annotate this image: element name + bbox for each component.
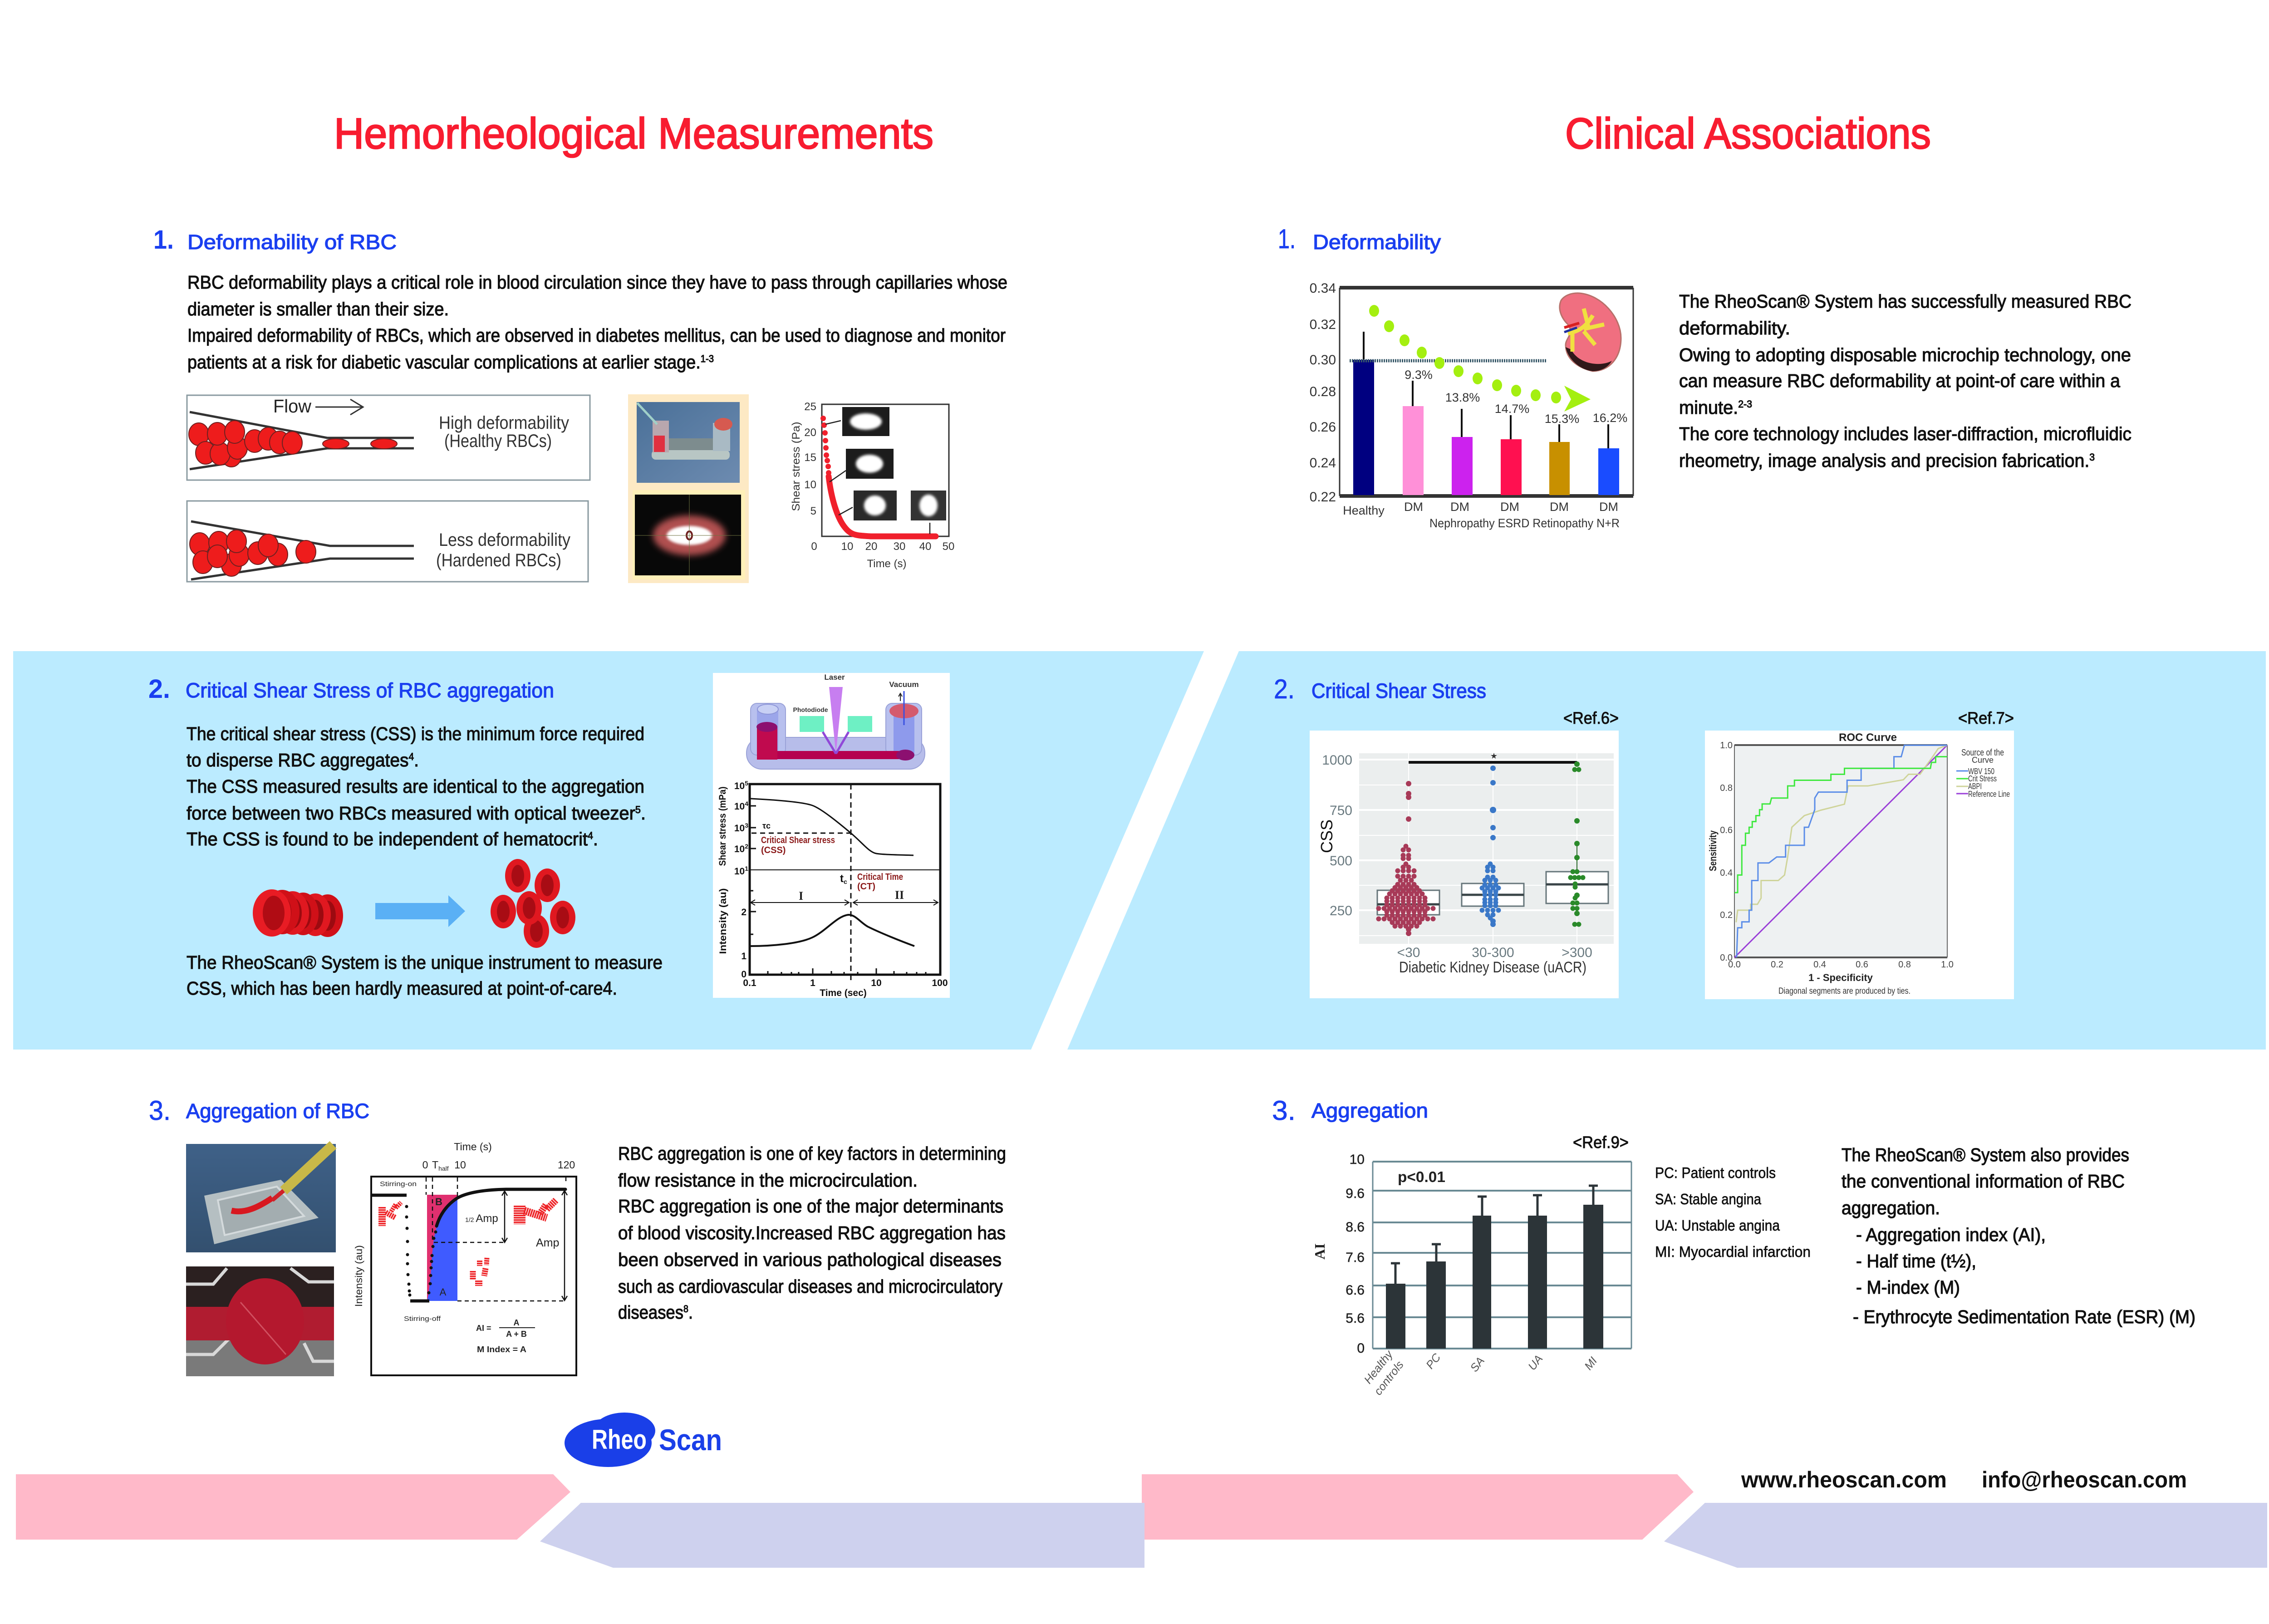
heading: deformability of RBC	[153, 225, 397, 255]
bar chart: aggregation index: 10	[1350, 1152, 1365, 1167]
text block: aggregation parameters	[1842, 1144, 2195, 1327]
reference label 7: <Ref.7>	[1958, 709, 2014, 727]
legend: ROC sources: Reference Line	[1968, 790, 2010, 799]
bar chart: aggregation index: PC	[1424, 1351, 1444, 1371]
heading: critical shear stress: 2.	[1274, 674, 1295, 704]
text block: RheoScan deformability: The RheoScan® System has successfully measured RBC	[1679, 291, 2131, 312]
diagram: high deformability flow: (Healthy RBCs)	[444, 431, 552, 451]
bar chart: aggregation index: AI	[1311, 1243, 1328, 1260]
text block: aggregation description: .	[688, 1302, 693, 1323]
text block: deformability description: 1-3	[701, 353, 714, 364]
bar chart: deformability by group: 0.22	[1310, 490, 1336, 505]
text block: CSS definition: to disperse RBC aggregates	[187, 750, 420, 770]
text block: RheoScan deformability: can measure RBC deformability at point-of care within a	[1679, 370, 2120, 391]
text block: aggregation parameters: aggregation.	[1842, 1197, 1940, 1218]
heading: deformability: Deformability	[1313, 231, 1441, 254]
bar chart: deformability by group: 16.2%	[1593, 411, 1627, 425]
text block: RheoScan CSS: The RheoScan® System is the unique instrument to measure	[187, 952, 663, 973]
insets	[842, 407, 946, 520]
bar chart: aggregation index: 9.6	[1346, 1186, 1365, 1201]
text block: deformability description: RBC deformability plays a critical role in blood circulation since they have to pass through capillaries whose	[187, 272, 1007, 293]
text block: aggregation parameters: - Half time (t½),	[1856, 1251, 1976, 1271]
panel: clinical deformability	[1278, 224, 2131, 530]
bar chart: deformability by group: DM	[1599, 500, 1618, 514]
text block: CSS definition: .	[641, 803, 646, 824]
bar chart: deformability by group: 0.32	[1310, 317, 1336, 332]
bar chart: aggregation index: SA	[1468, 1354, 1487, 1374]
footer arrow: right pink	[1142, 1474, 1694, 1540]
heading: deformability of RBC: Deformability of RBC	[187, 231, 397, 254]
photo: red blood in chip chamber	[186, 1266, 334, 1376]
chart: shear stress and intensity versus time: 2	[741, 907, 747, 917]
legend: ROC sources	[1956, 748, 2010, 799]
icon: kidney	[1560, 293, 1621, 371]
text block: CSS definition: 4	[588, 830, 593, 841]
bar chart: aggregation index: 8.6	[1346, 1220, 1365, 1235]
dots: uACR under 30	[1379, 846, 1439, 926]
chart: shear stress decay: 0	[811, 540, 817, 553]
chart: aggregation kinetics	[353, 1141, 576, 1375]
heading: critical shear stress: 2.	[148, 674, 170, 704]
heading: critical shear stress: Critical Shear Stress	[1311, 679, 1486, 702]
chart: shear stress and intensity versus time: 4	[745, 800, 748, 807]
legend: patient group abbreviations: UA: Unstable angina	[1655, 1217, 1780, 1234]
text block: CSS definition: force between two RBCs measured with optical tweezer	[187, 803, 647, 824]
text block: RheoScan deformability: deformability.	[1679, 318, 1790, 339]
chart: aggregation kinetics: T	[432, 1159, 438, 1171]
chart: ROC curve: 0.8	[1720, 783, 1733, 793]
arrow: disaggregation	[375, 895, 465, 927]
chart: ROC curve: Diagonal segments are produced by ties.	[1778, 986, 1910, 996]
chart: shear stress and intensity versus time: 0.1	[743, 978, 756, 988]
heading: aggregation	[1272, 1095, 1428, 1126]
chart: shear stress decay: 25	[804, 401, 816, 413]
chart: shear stress and intensity versus time: 10	[734, 801, 745, 812]
bar chart: deformability by group: Nephropathy ESRD Retinopathy N+R	[1429, 516, 1620, 530]
chart: shear stress and intensity versus time: 1	[745, 865, 748, 872]
chart: ROC curve: 0.8	[1898, 960, 1911, 970]
text block: CSS definition: .	[593, 829, 598, 849]
logo: RheoScan	[565, 1413, 722, 1467]
chart: aggregation kinetics: Stirring-off	[404, 1315, 441, 1323]
panel: deformability of RBC	[153, 225, 1007, 583]
chart: shear stress and intensity versus time: 10	[734, 781, 745, 791]
diagram: microchip with laser: Laser	[824, 673, 845, 682]
logo: RheoScan: Scan	[659, 1423, 722, 1457]
diagram: less deformability flow	[187, 501, 588, 582]
footer arrow: right lavender	[1664, 1503, 2267, 1568]
bar chart: aggregation index: 6.6	[1346, 1283, 1365, 1298]
chart: shear stress and intensity versus time: Intensity (au)	[718, 888, 728, 954]
text block: RheoScan deformability: minute.	[1679, 397, 1740, 418]
heading: aggregation of RBC: 3.	[149, 1095, 171, 1126]
diagram: high deformability flow: High deformability	[439, 413, 569, 433]
title: Clinical Associations: Clinical Associations	[1565, 109, 1931, 158]
heading: critical shear stress	[1274, 674, 1486, 704]
bar chart: deformability by group: 9.3%	[1405, 368, 1433, 382]
chart: ROC curve: 0.6	[1720, 825, 1733, 835]
heading: critical shear stress: Critical Shear Stress of RBC aggregation	[186, 679, 554, 702]
text block: CSS definition: The critical shear stress (CSS) is the minimum force required	[187, 723, 644, 744]
chart: CSS versus diabetic kidney disease: 750	[1330, 803, 1352, 818]
footer arrow: left lavender	[540, 1503, 1144, 1568]
diagram: less deformability flow: (Hardened RBCs)	[436, 550, 561, 570]
text block: aggregation parameters: - Aggregation index (AI),	[1856, 1224, 2046, 1245]
text block: aggregation description	[618, 1143, 1006, 1323]
chart: shear stress decay: 40	[919, 540, 931, 553]
icon: stacked red blood cells	[253, 889, 343, 937]
bar chart: aggregation index: Healthy	[1362, 1348, 1396, 1386]
photo: pipette on microchip	[186, 1144, 336, 1252]
diagram: microchip with laser	[747, 673, 925, 769]
bar chart: aggregation index: 5.6	[1346, 1311, 1365, 1326]
chart: shear stress and intensity versus time: II	[895, 888, 904, 902]
text block: RheoScan deformability: rheometry, image analysis and precision fabrication.	[1679, 450, 2107, 471]
text block: deformability description: diameter is smaller than their size.	[187, 299, 449, 319]
diagram: microchip with laser: Vacuum	[889, 680, 919, 689]
chart: ROC curve: 0.4	[1720, 868, 1733, 878]
chart: CSS versus diabetic kidney disease: ★	[1490, 751, 1498, 760]
legend: ROC sources: WBV 150	[1968, 767, 1994, 776]
chart: shear stress and intensity versus time: c	[844, 878, 847, 885]
bar chart: deformability by group: 14.7%	[1495, 402, 1529, 416]
bar chart: deformability by group: 13.8%	[1445, 391, 1480, 404]
bar chart: aggregation index: 7.6	[1346, 1250, 1365, 1265]
chart: ROC curve	[1705, 731, 2014, 999]
text block: RheoScan deformability: Owing to adopting disposable microchip technology, one	[1679, 344, 2131, 365]
chart: CSS versus diabetic kidney disease	[1310, 731, 1619, 998]
dots: uACR 30 to 300	[1482, 864, 1504, 918]
chart: ROC curve: 1.0	[1720, 741, 1733, 751]
bar chart: deformability by group: 15.3%	[1545, 412, 1579, 426]
bar chart: deformability by group: 0.34	[1310, 281, 1336, 296]
bar chart: aggregation index: p<0.01	[1398, 1168, 1445, 1185]
title: Hemorheological Measurements: Hemorheological Measurements	[334, 109, 933, 158]
bar chart: aggregation index: 0	[1357, 1341, 1365, 1356]
text block: CSS definition	[187, 723, 646, 849]
text block: CSS definition: .	[414, 750, 419, 770]
text block: deformability description: patients at a risk for diabetic vascular complications at earlier stage.	[187, 352, 745, 373]
text block: aggregation description: 8	[683, 1303, 688, 1315]
diagram: high deformability flow: Flow	[273, 396, 311, 417]
chart: aggregation kinetics: A	[514, 1318, 519, 1327]
bar chart: deformability by group: 0.26	[1310, 420, 1336, 435]
legend: ROC sources: Crit Stress	[1968, 774, 1997, 783]
diagram: less deformability flow: Less deformability	[439, 530, 570, 550]
legend: patient group abbreviations: SA: Stable angina	[1655, 1191, 1762, 1207]
text block: aggregation parameters: the conventional information of RBC	[1842, 1171, 2125, 1192]
legend: ROC sources: Source of the	[1961, 748, 2004, 758]
text block: aggregation description: RBC aggregation is one of the major determinants	[618, 1196, 1003, 1217]
legend: ROC sources: Curve	[1972, 756, 1994, 765]
heading: deformability of RBC: 1.	[153, 225, 174, 255]
chart: shear stress decay: 5	[810, 505, 816, 517]
legend: ROC sources: ABPI	[1968, 782, 1982, 791]
bar chart: aggregation index: controls	[1372, 1359, 1406, 1398]
bar chart: deformability by group: Healthy	[1343, 504, 1385, 517]
figure panel: microchip and CSS chart	[713, 673, 950, 998]
diagram: high deformability flow	[187, 395, 590, 480]
panel: aggregation of RBC	[149, 1095, 1006, 1376]
bar chart: deformability by group	[1310, 281, 1633, 530]
heading: aggregation: 3.	[1272, 1095, 1296, 1126]
chart: shear stress and intensity versus time: Shear stress (mPa)	[717, 787, 728, 866]
chart: shear stress decay: 20	[865, 540, 877, 553]
text block: aggregation description: flow resistance in the microcirculation.	[618, 1170, 918, 1191]
text block: RheoScan deformability	[1679, 291, 2131, 471]
reference label 6: <Ref.6>	[1563, 709, 1619, 727]
bar chart: deformability by group: DM	[1500, 500, 1519, 514]
bar chart: deformability by group: 0.28	[1310, 384, 1336, 399]
dots: uACR over 300	[1571, 770, 1583, 924]
chart: shear stress and intensity versus time: 2	[745, 843, 748, 850]
chart: aggregation kinetics: Intensity (au)	[353, 1245, 364, 1307]
chart: shear stress decay: 10	[804, 479, 816, 491]
chart: shear stress and intensity versus time: I	[799, 889, 803, 903]
text block: aggregation description: RBC aggregation is one of key factors in determining	[618, 1143, 1006, 1164]
chart: shear stress and intensity versus time: Critical Time	[857, 872, 903, 882]
chart: shear stress decay: 20	[804, 427, 816, 439]
chart: CSS versus diabetic kidney disease: 30-300	[1472, 945, 1514, 960]
text block: RheoScan deformability: 2-3	[1738, 398, 1752, 410]
chart: shear stress and intensity versus time: t	[840, 873, 844, 885]
text block: RheoScan deformability: 3	[2089, 451, 2095, 463]
bar chart: deformability by group: 0.24	[1310, 456, 1336, 471]
chart: ROC curve: 0.0	[1720, 953, 1733, 963]
text block: CSS definition: 5	[635, 804, 641, 815]
photo panel: microchip and diffraction pattern	[628, 394, 749, 583]
background band: left section 2	[13, 651, 1204, 1050]
footer contact: email: info@rheoscan.com	[1982, 1467, 2187, 1492]
chart: aggregation kinetics: 120	[558, 1159, 575, 1171]
icon: dispersed red blood cells	[491, 859, 575, 948]
chart: ROC curve: 0.2	[1771, 960, 1783, 970]
chart: shear stress and intensity versus time: 10	[734, 844, 745, 854]
area A	[427, 1198, 457, 1301]
legend: patient group abbreviations: MI: Myocardial infarction	[1655, 1243, 1811, 1260]
text block: aggregation parameters: - Erythrocyte Sedimentation Rate (ESR) (M)	[1853, 1306, 2195, 1327]
bar chart: deformability by group: 0.30	[1310, 353, 1336, 368]
text block: RheoScan deformability: The core technology includes laser-diffraction, microfluidic	[1679, 423, 2131, 444]
chart: ROC curve: 0.0	[1728, 960, 1741, 970]
chart: shear stress decay: 10	[841, 540, 853, 553]
chart: ROC curve: Sensitivity	[1707, 830, 1719, 871]
text block: aggregation parameters: - M-index (M)	[1856, 1277, 1960, 1298]
reference label 9: <Ref.9>	[1573, 1133, 1629, 1152]
chart: shear stress and intensity versus time: Critical Shear stress	[761, 835, 835, 845]
heading: deformability	[1278, 224, 1441, 254]
footer arrow: left pink	[16, 1474, 570, 1540]
chart: shear stress and intensity versus time: (CT)	[857, 882, 875, 892]
chart: ROC curve: 0.4	[1813, 960, 1826, 970]
chart: shear stress and intensity versus time	[717, 780, 948, 998]
text block: aggregation description: such as cardiovascular diseases and microcirculatory	[618, 1276, 1002, 1297]
diagram: microchip with laser: Photodiode	[793, 706, 828, 713]
chart: ROC curve: ROC Curve	[1839, 731, 1897, 744]
chart: shear stress and intensity versus time: 1	[741, 951, 747, 962]
text block: RheoScan CSS: CSS, which has been hardly measured at point-of-care4.	[187, 978, 617, 999]
panel: critical shear stress of RBC aggregation	[148, 673, 950, 999]
chart: shear stress decay	[790, 401, 954, 570]
chart: shear stress decay: 30	[894, 540, 905, 553]
chart: aggregation kinetics: 10	[454, 1159, 466, 1171]
chart: CSS versus diabetic kidney disease: Diabetic Kidney Disease (uACR)	[1399, 959, 1586, 976]
chart: shear stress and intensity versus time: 10	[734, 823, 745, 834]
chart: ROC curve: 1 - Specificity	[1808, 972, 1873, 983]
chart: aggregation kinetics: B	[435, 1196, 442, 1207]
chart: ROC curve: 0.2	[1720, 910, 1733, 920]
panel: clinical aggregation	[1272, 1095, 2195, 1398]
chart: aggregation kinetics: Stirring-on	[380, 1180, 417, 1188]
text block: deformability description	[187, 272, 1007, 373]
bar chart: aggregation index: UA	[1526, 1353, 1545, 1373]
background band: right section 2	[1067, 651, 2266, 1050]
text block: RheoScan CSS	[187, 952, 663, 999]
chart: shear stress and intensity versus time: (CSS)	[761, 845, 786, 855]
text block: aggregation parameters: The RheoScan® System also provides	[1842, 1144, 2129, 1165]
chart: ROC curve: 0.6	[1856, 960, 1868, 970]
heading: aggregation of RBC: Aggregation of RBC	[186, 1099, 369, 1123]
chart: aggregation kinetics: M Index = A	[477, 1345, 526, 1354]
text block: aggregation description: been observed in various pathological diseases	[618, 1249, 1002, 1270]
chart: CSS versus diabetic kidney disease: 1000	[1322, 753, 1352, 768]
heading: aggregation of RBC	[149, 1095, 369, 1126]
chart: aggregation kinetics: AI =	[476, 1324, 491, 1333]
chart: shear stress and intensity versus time: 10	[734, 866, 745, 877]
bar chart: deformability by group: DM	[1550, 500, 1569, 514]
chart: aggregation kinetics: half	[438, 1165, 449, 1172]
text block: aggregation description: diseases	[618, 1302, 692, 1323]
chart: shear stress decay: Shear stress (Pa)	[790, 422, 802, 511]
chart: CSS versus diabetic kidney disease: 500	[1330, 854, 1352, 868]
text block: deformability description: Impaired deformability of RBCs, which are observed in diabetes mellitus, can be used to diagnose and monitor	[187, 325, 1006, 346]
chart: shear stress and intensity versus time: 0	[741, 969, 747, 980]
chart: aggregation kinetics: A + B	[506, 1330, 527, 1339]
chart: shear stress and intensity versus time: 1	[810, 978, 815, 988]
chart: CSS versus diabetic kidney disease: CSS	[1317, 819, 1336, 853]
heading: deformability: 1.	[1278, 224, 1296, 254]
chart: CSS versus diabetic kidney disease: 250	[1330, 903, 1352, 918]
chart: shear stress and intensity versus time: 100	[932, 978, 948, 988]
legend: patient group abbreviations: PC: Patient controls	[1655, 1164, 1776, 1181]
bar chart: aggregation index: MI	[1582, 1354, 1600, 1373]
chart: CSS versus diabetic kidney disease: >300	[1562, 945, 1592, 960]
chart: shear stress and intensity versus time: τc	[762, 821, 771, 830]
area B	[427, 1195, 457, 1301]
heading: aggregation: Aggregation	[1311, 1099, 1428, 1122]
chart: aggregation kinetics: 1/2 Amp	[465, 1212, 498, 1225]
text block: CSS definition: 4	[409, 751, 414, 762]
chart: shear stress and intensity versus time: 3	[745, 822, 748, 829]
legend: patient group abbreviations	[1655, 1164, 1811, 1260]
footer contact: website: www.rheoscan.com	[1741, 1467, 1947, 1492]
chart: CSS versus diabetic kidney disease: <30	[1397, 945, 1420, 960]
chart: shear stress and intensity versus time: 10	[871, 978, 882, 988]
text block: aggregation description: of blood viscosity.Increased RBC aggregation has	[618, 1222, 1006, 1243]
chart: aggregation kinetics: A	[440, 1286, 447, 1298]
chart: shear stress decay: Time (s)	[867, 558, 907, 570]
chart: aggregation kinetics: Amp	[536, 1236, 559, 1249]
bar chart: deformability by group: DM	[1404, 500, 1423, 514]
bar chart: deformability by group: DM	[1450, 500, 1469, 514]
chart: aggregation kinetics: Time (s)	[454, 1141, 492, 1153]
bar chart: aggregation index	[1311, 1152, 1631, 1398]
logo: RheoScan: Rheo	[592, 1424, 647, 1455]
chart: aggregation kinetics: 0	[422, 1159, 428, 1171]
chart: ROC curve: 1.0	[1941, 960, 1954, 970]
chart: shear stress decay: 15	[804, 451, 816, 464]
text block: CSS definition: The CSS is found to be independent of hematocrit	[187, 829, 599, 849]
chart: shear stress and intensity versus time: Time (sec)	[820, 988, 867, 998]
chart: shear stress decay: 50	[943, 540, 954, 553]
chart: shear stress and intensity versus time: 5	[745, 780, 748, 787]
text block: CSS definition: The CSS measured results are identical to the aggregation	[187, 776, 644, 797]
panel: clinical critical shear stress	[1274, 674, 2014, 999]
